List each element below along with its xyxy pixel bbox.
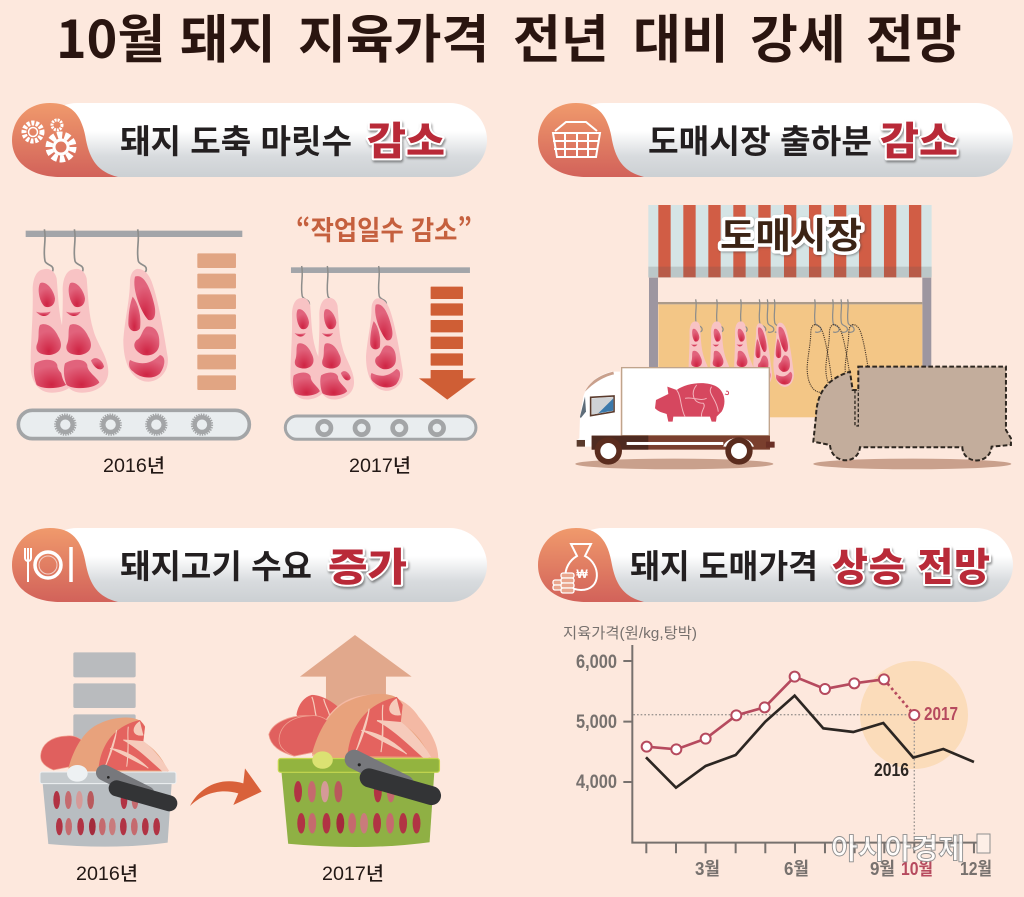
label: 2017: 2017년 — [349, 455, 411, 477]
icon: money bag: ₩ — [576, 567, 588, 581]
illustration: delivery truck — [575, 368, 775, 469]
x axis labels: 10월 — [901, 859, 933, 879]
illustration: 2016 carcasses and conveyor — [18, 229, 249, 439]
x axis labels: 3월 — [695, 859, 720, 879]
title: 대비 — [633, 0, 729, 73]
illustration: 2016 basket — [40, 652, 176, 847]
title: 강세 — [750, 0, 846, 73]
y axis labels: 6,000 — [576, 652, 617, 673]
x axis labels: 6월 — [784, 859, 809, 879]
icon: shopping basket — [553, 122, 600, 157]
y axis labels — [576, 652, 617, 793]
title: 10월 — [56, 0, 165, 73]
line: 2017 series — [642, 672, 919, 754]
chart highlight circle — [860, 661, 968, 769]
title: 돼지 — [180, 0, 276, 73]
panel: wholesale price outlook — [538, 528, 1013, 879]
title: 전망 — [866, 0, 962, 73]
label: 2016: 2016년 — [103, 455, 165, 477]
label: wholesale market sign: 도매시장 — [720, 207, 862, 259]
header: wholesale shipments: 도매시장 출하분 — [648, 115, 872, 163]
icon: plate and cutlery — [25, 547, 71, 582]
header: wholesale price rise — [538, 528, 1013, 602]
arrow: year-over-year — [190, 768, 262, 806]
illustration: 2017 carcasses and conveyor — [285, 266, 476, 439]
panel: wholesale market shipments decrease — [538, 103, 1013, 469]
chart: carcass price 2016 vs 2017 — [563, 625, 992, 879]
title: 전년 — [513, 0, 609, 73]
header: wholesale price rise: 상승 전망 — [832, 537, 990, 593]
callout: fewer working days: “작업일수 감소” — [296, 209, 472, 248]
y axis title: 지육가격(원/kg,탕박) — [563, 625, 697, 642]
watermark: 아시아경제 — [831, 833, 965, 866]
header: wholesale price rise: 돼지 도매가격 — [630, 540, 818, 588]
x axis labels: 9월 — [870, 859, 895, 879]
header: slaughter count: 돼지 도축 마릿수 — [120, 115, 352, 163]
x axis labels — [695, 859, 992, 879]
label: 2016: 2016년 — [76, 863, 138, 885]
series label: 2017: 2017 — [924, 704, 958, 724]
header: wholesale shipments: 감소 — [880, 111, 958, 167]
y axis labels: 5,000 — [576, 712, 617, 733]
illustration: market stall — [648, 205, 932, 417]
label: 2017: 2017년 — [322, 863, 384, 885]
y axis labels: 4,000 — [576, 772, 617, 793]
line: 2016 series — [646, 696, 974, 788]
title: 지육가격 — [298, 0, 489, 73]
panel: slaughter count decrease — [12, 103, 487, 477]
header: pork demand: 증가 — [328, 537, 407, 593]
header: slaughter count: 감소 — [367, 111, 445, 167]
panel: pork demand increase — [12, 528, 487, 885]
x axis labels: 12월 — [960, 859, 992, 879]
illustration: empty dashed truck — [813, 367, 1011, 469]
header: wholesale shipments — [538, 103, 1013, 177]
icon: money bag — [553, 544, 597, 593]
icon: pig — [655, 383, 729, 422]
icon: gears — [24, 120, 73, 159]
header: slaughter count — [12, 103, 487, 177]
illustration: 2017 basket — [269, 635, 439, 847]
series label: 2016: 2016 — [874, 760, 909, 780]
header: pork demand — [12, 528, 487, 602]
header: pork demand: 돼지고기 수요 — [120, 540, 312, 588]
